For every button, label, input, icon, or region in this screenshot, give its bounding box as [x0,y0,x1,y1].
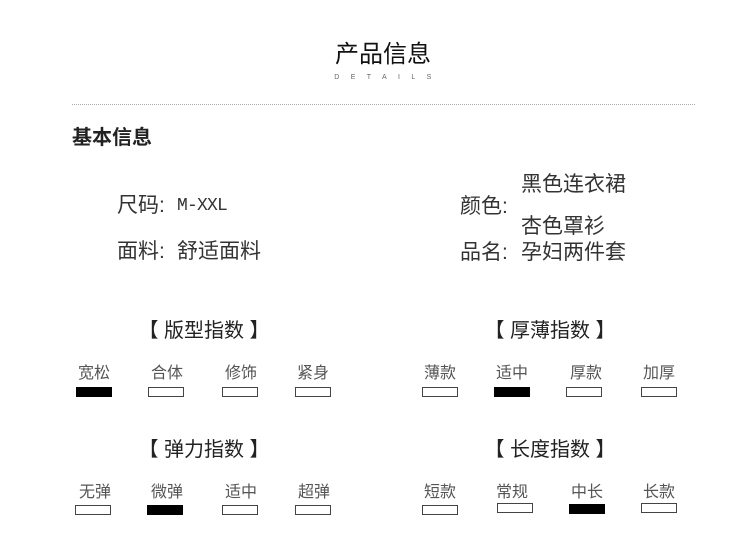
field: product name: 品名: [460,241,508,264]
option: slim: 修饰 [225,365,257,382]
heading: fit index: 【 版型指数 】 [138,320,270,342]
field: colour value one: 黑色连衣裙 [521,173,626,196]
option: slight stretch, selected: 微弹 [151,484,183,501]
option: mid length, selected [569,483,605,514]
panel: thickness index [422,320,677,397]
option: regular: 常规 [496,484,528,501]
option: loose, selected [76,364,112,397]
option: slim [222,364,258,397]
option: extra thick [641,364,677,397]
option: thin: 薄款 [424,365,456,382]
option: medium: 适中 [225,484,257,501]
field: colour value two: 杏色罩衫 [521,215,605,238]
field: size: 尺码: [117,194,165,217]
option: regular [148,364,184,397]
title: 产品信息 [335,41,431,68]
option: short: 短款 [424,484,456,501]
option: super stretch: 超弹 [298,484,330,501]
option: thin [422,364,458,397]
option: medium, selected: 适中 [496,365,528,382]
dotted divider [72,104,695,105]
field: product name: 孕妇两件套 [521,241,626,264]
option: mid length, selected: 中长 [571,484,603,501]
option: short [422,483,458,515]
field: size: M-XXL [177,196,227,216]
option: extra thick: 加厚 [643,365,675,382]
option: long: 长款 [643,484,675,501]
option: no stretch [75,484,111,515]
option: thick: 厚款 [570,365,602,382]
option: tight: 紧身 [297,365,329,382]
option: regular: 合体 [151,365,183,382]
option: super stretch [295,483,331,515]
field: colour label: 颜色: [460,195,508,218]
field: product name [460,241,626,264]
heading: thickness index: 【 厚薄指数 】 [484,320,616,342]
option: loose, selected: 宽松 [78,365,110,382]
field: fabric: 面料: [117,240,165,263]
option: medium, selected [494,364,530,397]
option: long [641,483,677,513]
option: thick [566,364,602,397]
option: medium [222,483,258,515]
heading: elasticity index: 【 弹力指数 】 [138,439,270,461]
option: no stretch: 无弹 [79,484,111,501]
heading: length index: 【 长度指数 】 [484,439,616,461]
heading: basic information: 基本信息 [72,127,152,149]
option: regular [496,484,533,513]
option: slight stretch, selected [147,483,183,515]
option: tight [295,364,331,397]
panel: fit index [76,320,331,397]
field: fabric: 舒适面料 [177,240,261,263]
panel: elasticity index [75,439,331,515]
subtitle: details: DETAILS [334,74,443,81]
field: fabric [117,240,261,263]
field: size [117,194,227,217]
panel: length index [422,439,677,515]
